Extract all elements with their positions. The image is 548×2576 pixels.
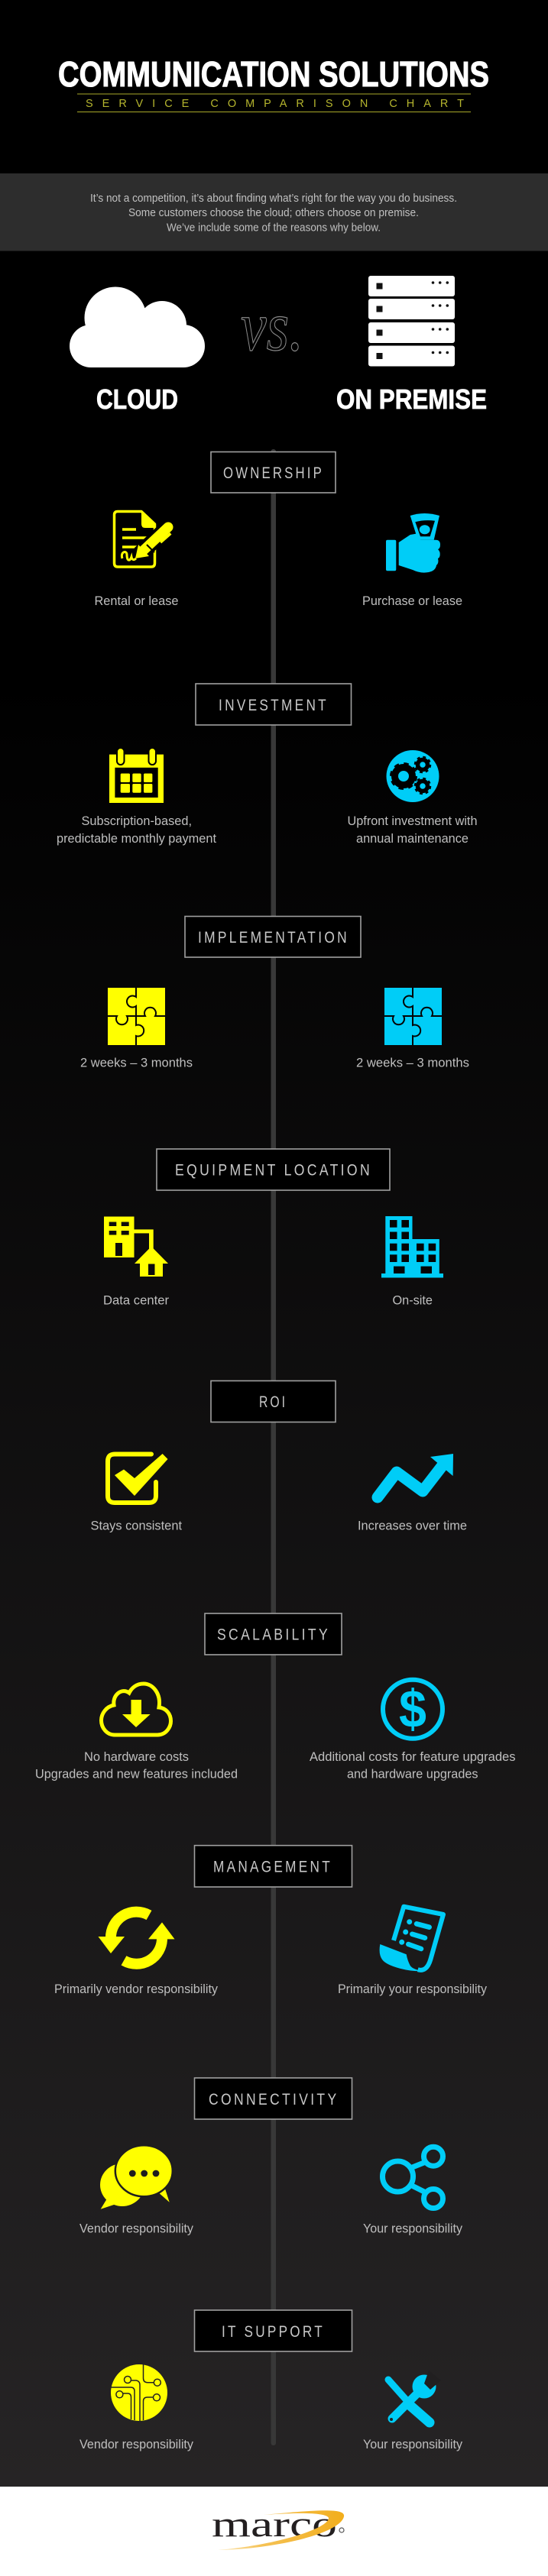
label box: investment: INVESTMENT	[219, 697, 329, 714]
icon: cloud download	[101, 1684, 171, 1735]
label box: management	[194, 1846, 352, 1887]
icon: dollar coin: $	[399, 1679, 426, 1739]
label box: equipment location	[157, 1149, 390, 1190]
icon: data center	[104, 1216, 168, 1277]
label box: investment	[196, 684, 352, 725]
intro band: We’ve include some of the reasons why below.	[167, 222, 381, 234]
subtitle: SERVICE COMPARISON CHART	[86, 98, 464, 110]
panel: connectivity	[79, 2078, 463, 2235]
text: upfront: annual maintenance	[356, 832, 469, 846]
text: increases: Increases over time	[358, 1519, 467, 1532]
icon: calendar	[109, 748, 164, 803]
center spine	[271, 449, 276, 2445]
text: no hardware: No hardware costs	[84, 1750, 189, 1764]
text: your primary: Primarily your responsibility	[338, 1982, 488, 1996]
logo: marco: marco	[212, 2504, 337, 2545]
text: purchase: Purchase or lease	[362, 594, 462, 608]
icon: blue puzzle	[384, 988, 442, 1045]
label box: management: MANAGEMENT	[213, 1858, 332, 1876]
label box: equipment location: EQUIPMENT LOCATION	[175, 1161, 372, 1180]
text: additional costs	[310, 1750, 515, 1782]
icon: sync arrows	[98, 1912, 174, 1964]
icon: yellow puzzle	[108, 988, 165, 1045]
text: additional costs: Additional costs for feature upgrades	[310, 1750, 515, 1764]
heading: cloud: CLOUD	[96, 383, 178, 415]
panel: equipment location	[103, 1149, 443, 1308]
logo: marco	[212, 2504, 344, 2550]
panel: ownership	[95, 452, 462, 608]
label box: scalability	[205, 1613, 342, 1655]
text: stays consistent: Stays consistent	[90, 1519, 182, 1532]
label box: implementation: IMPLEMENTATION	[198, 929, 349, 947]
panel: roi	[90, 1381, 467, 1532]
text: data center: Data center	[103, 1294, 170, 1308]
text: subscription	[57, 814, 216, 846]
icon: office building	[381, 1216, 443, 1277]
text: right timeline: 2 weeks – 3 months	[356, 1056, 469, 1070]
icon: wrench and screwdriver	[388, 2371, 441, 2422]
icon: chat bubbles	[100, 2145, 173, 2209]
label box: connectivity	[194, 2078, 352, 2119]
text: subscription: Subscription-based,	[81, 814, 192, 828]
label box: scalability: SCALABILITY	[217, 1626, 330, 1644]
icon: server rack	[368, 276, 455, 367]
label box: ownership	[211, 452, 336, 493]
icon: cloud	[70, 287, 205, 367]
icon: hand holding cash	[386, 513, 440, 573]
label box: roi	[211, 1381, 336, 1422]
intro band: It’s not a competition, it’s about finding what’s right for the way you do business.	[90, 193, 457, 205]
label box: roi: ROI	[259, 1393, 287, 1411]
text: additional costs: and hardware upgrades	[347, 1768, 478, 1782]
text: left timeline: 2 weeks – 3 months	[80, 1056, 193, 1070]
vs.: vs.	[241, 287, 303, 365]
text: subscription: predictable monthly payment	[57, 832, 216, 846]
text: rental: Rental or lease	[95, 594, 179, 608]
icon: contract and pen	[115, 511, 170, 567]
icon: dollar coin	[383, 1679, 443, 1739]
label box: it support: IT SUPPORT	[222, 2323, 325, 2341]
intro band	[0, 173, 548, 251]
text: your: Your responsibility	[363, 2222, 463, 2235]
panel: investment	[57, 684, 477, 846]
icon: circuit	[110, 2364, 167, 2421]
icon: gears	[387, 750, 439, 802]
text: vendor primary: Primarily vendor responsibility	[54, 1982, 219, 1996]
text: vendor: Vendor responsibility	[79, 2222, 194, 2235]
label box: connectivity: CONNECTIVITY	[209, 2091, 339, 2108]
text: your support: Your responsibility	[363, 2438, 463, 2451]
text: upfront	[347, 814, 477, 846]
heading: on premise: ON PREMISE	[336, 383, 487, 415]
panel: implementation	[80, 917, 469, 1070]
intro band: Some customers choose the cloud; others choose on premise.	[128, 207, 419, 219]
text: no hardware	[35, 1750, 238, 1782]
panel: scalability	[35, 1613, 515, 1782]
icon: rising arrow	[378, 1454, 453, 1497]
footer band	[0, 2487, 548, 2576]
label box: implementation	[185, 917, 361, 957]
label box: ownership: OWNERSHIP	[223, 464, 324, 482]
text: upfront: Upfront investment with	[347, 814, 477, 828]
panel: management	[54, 1846, 488, 1996]
text: vendor support: Vendor responsibility	[79, 2438, 194, 2451]
text: on-site: On-site	[393, 1294, 433, 1308]
icon: check mark	[108, 1454, 168, 1503]
label box: it support	[194, 2310, 352, 2351]
text: no hardware: Upgrades and new features included	[35, 1768, 238, 1782]
icon: share nodes	[382, 2147, 443, 2208]
icon: checklist scroll	[380, 1907, 443, 1971]
panel: it support	[79, 2310, 463, 2451]
